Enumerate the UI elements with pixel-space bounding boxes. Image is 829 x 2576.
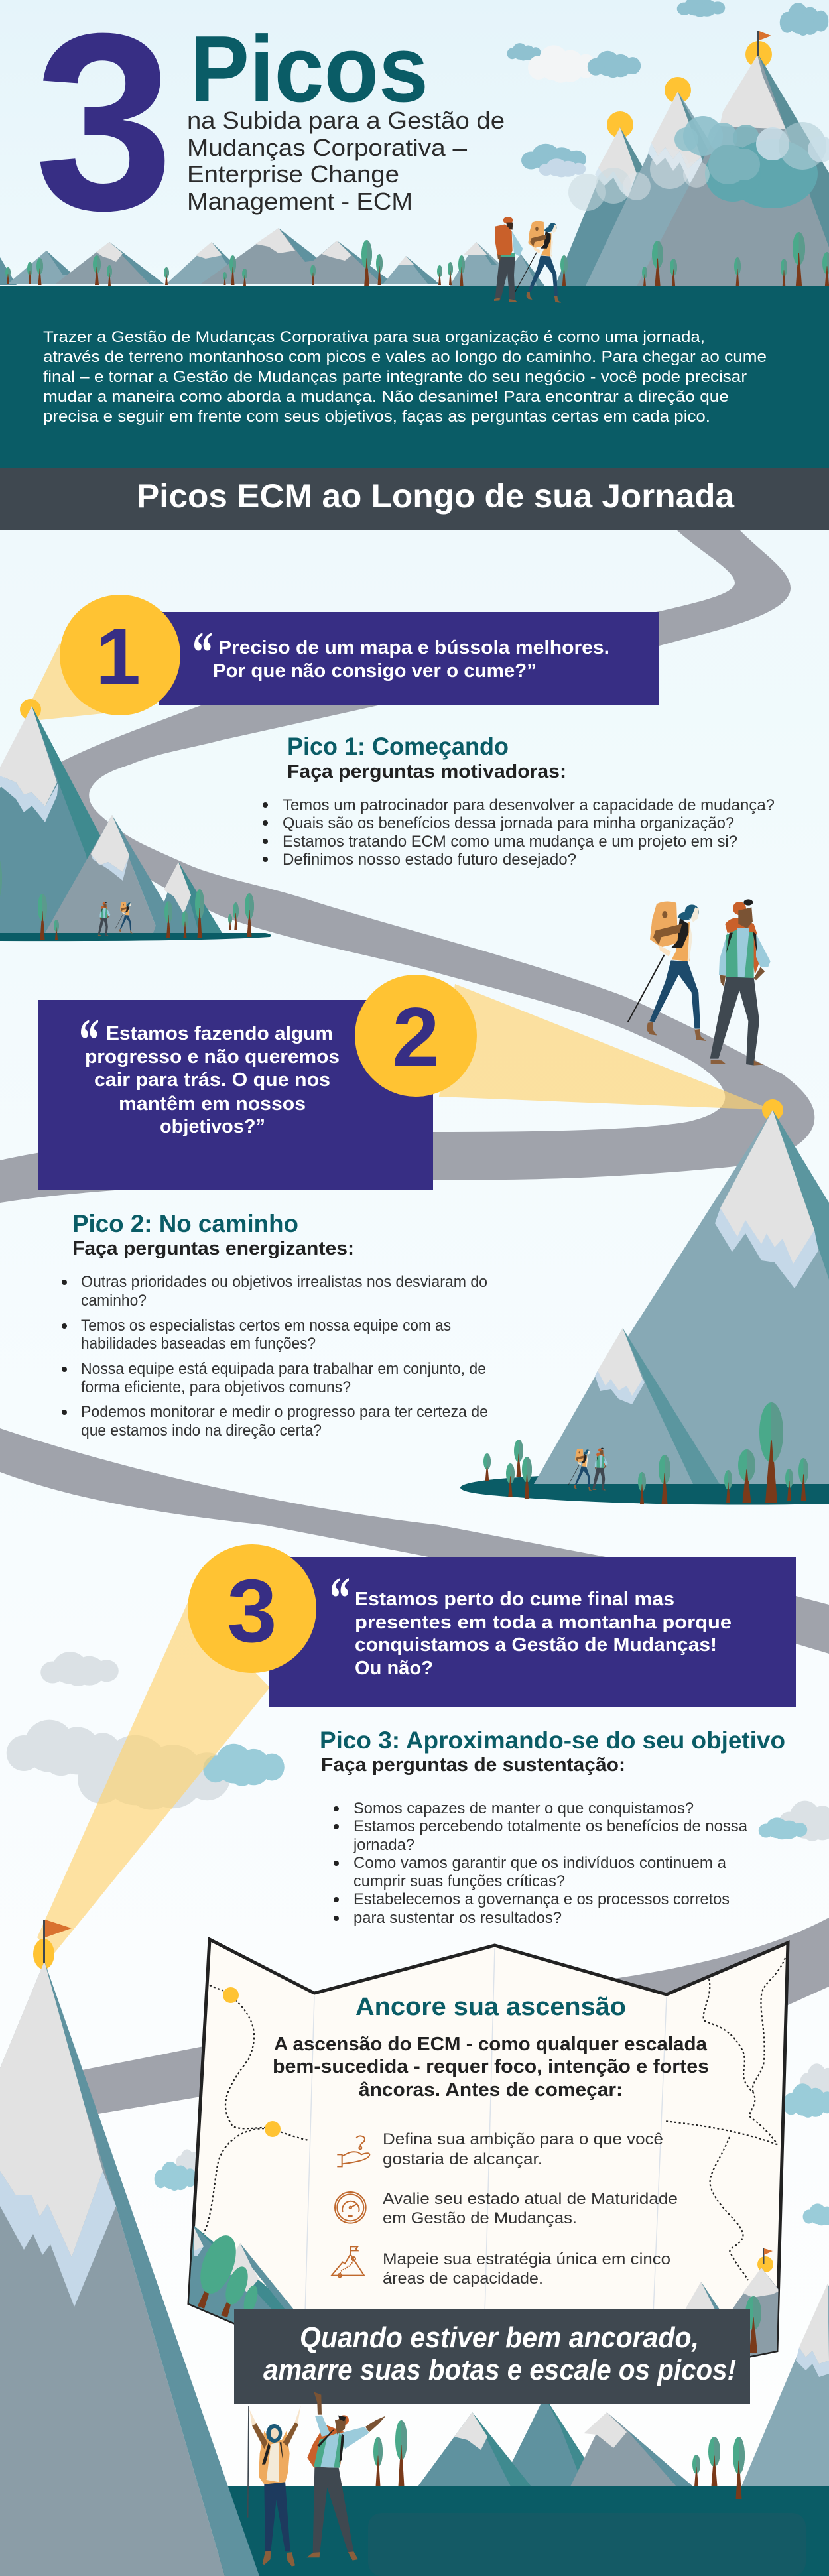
number badge 3: 3: [227, 1561, 277, 1661]
text: peak 3 questions: jornada?: [353, 1836, 414, 1854]
panel: peak 3 quote: Estamos perto do cume final mas: [355, 1589, 674, 1610]
text: peak 2 questions: [62, 1210, 488, 1440]
header main mountains with suns and flag: [555, 31, 829, 286]
panel: peak 3 quote: conquistamos a Gestão de Mudanças!: [355, 1634, 717, 1656]
text: peak 3 questions: [320, 1727, 785, 1927]
number badge 2: [355, 975, 477, 1097]
text: peak 2 questions: habilidades baseadas em funções?: [81, 1335, 316, 1353]
panel: peak 2 quote: cair para trás. O que nos: [94, 1070, 330, 1091]
icon: mountain with flag: [332, 2246, 364, 2277]
page background below header: [0, 530, 829, 2576]
intro paragraph: [43, 328, 767, 426]
text: peak 2 questions: caminho?: [81, 1292, 147, 1310]
map heading: Ancore sua ascensão: [355, 1993, 626, 2021]
header trees: [5, 232, 829, 289]
text: peak 2 questions: forma eficiente, para objetivos comuns?: [81, 1379, 351, 1396]
man with raised arms: [306, 2392, 386, 2561]
subtitle: [187, 107, 505, 215]
panel: peak 3 quote: [269, 1557, 796, 1707]
text: peak 3 questions: Estamos percebendo totalmente os benefícios de nossa: [353, 1817, 748, 1835]
panel: map card: [188, 1939, 788, 2361]
panel: peak 2 quote: “: [79, 1007, 99, 1073]
subtitle: Management - ECM: [187, 188, 413, 215]
text: strategy: [383, 2250, 670, 2288]
beam peak 2: [439, 984, 773, 1110]
beam peak 1: [27, 643, 109, 720]
text: peak 1 questions: Temos um patrocinador para desenvolver a capacidade de mudança?: [283, 796, 775, 814]
header low mountain range: [0, 228, 544, 286]
text: strategy: Mapeie sua estratégia única em cinco: [383, 2250, 670, 2268]
text: peak 1 questions: Pico 1: Começando: [287, 733, 509, 760]
small man: [98, 902, 110, 936]
panel: peak 2 quote: objetivos?”: [160, 1116, 265, 1137]
text: peak 1 questions: Definimos nosso estado futuro desejado?: [283, 851, 576, 869]
text: peak 2 questions: Temos os especialistas certos em nossa equipe com as: [81, 1317, 451, 1335]
illustration: peak 1 mountains and hikers: [0, 699, 271, 941]
text: peak 2 questions: Podemos monitorar e medir o progresso para ter certeza de: [81, 1403, 488, 1421]
big foreground mountain bottom left: [0, 1920, 259, 2576]
woman hiker: [628, 902, 706, 1041]
small man: [592, 1448, 608, 1490]
header hikers seen from behind: [494, 217, 561, 303]
winding road middle: [0, 1428, 829, 1654]
woman with raised arms: [248, 2405, 301, 2567]
intro paragraph: mudar a maneira como aborda a mudança. Não desanime! Para encontrar a direção que: [43, 388, 729, 406]
text: peak 1 questions: Quais são os benefícios dessa jornada para minha organização?: [283, 814, 734, 832]
subtitle: Mudanças Corporativa –: [187, 134, 467, 161]
intro paragraph: através de terreno montanhoso com picos e vales ao longo do caminho. Para chegar ao cume: [43, 348, 767, 366]
celebrating hikers: [248, 2392, 386, 2567]
text: strategy: áreas de capacidade.: [383, 2270, 543, 2288]
winding road lower: [82, 1918, 829, 2114]
map intro text: A ascensão do ECM - como qualquer escalada: [274, 2034, 708, 2055]
icon: hand with question mark: [337, 2136, 369, 2166]
right mountain bottom: [741, 2284, 829, 2486]
text: peak 3 questions: cumprir suas funções críticas?: [353, 1872, 565, 1890]
number badge 1: [60, 595, 180, 715]
subtitle: Enterprise Change: [187, 160, 399, 188]
text: peak 1 questions: [263, 733, 775, 869]
header sky: [0, 0, 829, 286]
clouds beside the map: [155, 2063, 829, 2225]
intro paragraph: precisa e seguir em frente com seus objetivos, faças as perguntas certas em cada pico.: [43, 408, 710, 426]
ground bottom: [219, 2486, 829, 2576]
panel: peak 1 quote: “: [192, 620, 213, 686]
illustration: peak 2 mountains and hikers: [460, 1099, 829, 1505]
woman with pole: [515, 221, 561, 303]
text: peak 3 questions: Como vamos garantir que os indivíduos continuem a: [353, 1854, 727, 1872]
number badge 3: [188, 1544, 316, 1673]
text: peak 3 questions: Pico 3: Aproximando-se do seu objetivo: [320, 1727, 785, 1754]
text: peak 3 questions: para sustentar os resultados?: [353, 1909, 562, 1927]
clouds right of peak 3 list: [759, 1801, 829, 1841]
map flag: [763, 2248, 773, 2264]
text: peak 2 questions: Nossa equipe está equipada para trabalhar em conjunto, de: [81, 1360, 486, 1378]
intro paragraph: Trazer a Gestão de Mudanças Corporativa para sua organização é como uma jornada,: [43, 328, 705, 346]
text: peak 2 questions: Outras prioridades ou objetivos irrealistas nos desviaram do: [81, 1273, 487, 1291]
clouds left of peak 3: [7, 1652, 285, 1810]
panel: peak 3 quote: presentes em toda a montanha porque: [355, 1612, 732, 1633]
text: peak 1 questions: Faça perguntas motivadoras:: [287, 761, 566, 782]
text: maturity: em Gestão de Mudanças.: [383, 2209, 577, 2227]
text: maturity: Avalie seu estado atual de Maturidade: [383, 2190, 678, 2208]
man hiker: [710, 899, 771, 1066]
text: ambition: gostaria de alcançar.: [383, 2150, 542, 2168]
closing call-to-action banner: amarre suas botas e escale os picos!: [263, 2354, 736, 2386]
section banner: Picos ECM ao Longo de sua Jornada: [137, 477, 735, 515]
icon: gauge: [335, 2192, 366, 2223]
man with orange backpack: [494, 217, 523, 302]
panel: peak 1 quote: Por que não consigo ver o cume?”: [213, 660, 537, 682]
beam peak 3: [37, 1603, 270, 1955]
map folds: [305, 1948, 667, 2314]
text: peak 3 questions: Estabelecemos a governança e os processos corretos: [353, 1890, 730, 1908]
text: ambition: Defina sua ambição para o que você: [383, 2130, 663, 2148]
background mountains bottom: [373, 2396, 745, 2499]
number badge 2: 2: [393, 990, 439, 1084]
subtitle: na Subida para a Gestão de: [187, 107, 505, 134]
flag: [757, 31, 771, 56]
header cloud mass over the peaks: [568, 116, 829, 211]
trail markers: [223, 1987, 281, 2137]
small woman: [568, 1449, 592, 1491]
section banner: [0, 468, 829, 530]
dotted trails: [204, 1958, 785, 2280]
panel: peak 1 quote: Preciso de um mapa e bússola melhores.: [218, 637, 609, 658]
text: peak 2 questions: que estamos indo na direção certa?: [81, 1422, 322, 1440]
winding road upper: [0, 530, 814, 1203]
text: peak 3 questions: Somos capazes de manter o que conquistamos?: [353, 1800, 694, 1817]
intro paragraph: final – e tornar a Gestão de Mudanças parte integrante do seu negócio - você pode precisar: [43, 368, 747, 386]
text: peak 2 questions: Faça perguntas energizantes:: [72, 1238, 354, 1259]
panel: peak 3 quote: “: [330, 1565, 350, 1631]
panel: peak 1 quote: [159, 612, 659, 705]
panel: peak 2 quote: progresso e não queremos: [85, 1046, 340, 1068]
title Picos: Picos: [190, 17, 428, 122]
small woman: [115, 902, 133, 934]
map intro text: âncoras. Antes de começar:: [359, 2079, 623, 2101]
peak flag: [43, 1920, 72, 1963]
closing call-to-action banner: [234, 2309, 750, 2404]
panel: peak 2 quote: mantêm em nossos: [119, 1093, 306, 1115]
text: ambition: [383, 2130, 663, 2168]
map intro text: [273, 2034, 709, 2101]
panel: peak 3 quote: Ou não?: [355, 1658, 433, 1679]
number badge 1: 1: [96, 611, 141, 702]
large hikers on the road: [628, 899, 771, 1066]
text: peak 1 questions: Estamos tratando ECM como uma mudança e um projeto em si?: [283, 833, 737, 851]
text: peak 2 questions: Pico 2: No caminho: [72, 1210, 298, 1237]
map intro text: bem-sucedida - requer foco, intenção e fortes: [273, 2056, 709, 2077]
text: maturity: [383, 2190, 678, 2227]
header clouds: [507, 0, 828, 177]
text: peak 3 questions: Faça perguntas de sustentação:: [321, 1754, 625, 1776]
header teal band: [0, 286, 829, 468]
panel: peak 2 quote: [38, 1000, 433, 1190]
panel: peak 2 quote: Estamos fazendo algum: [106, 1023, 333, 1044]
map mini mountains: [188, 2226, 783, 2361]
closing call-to-action banner: Quando estiver bem ancorado,: [300, 2321, 699, 2354]
